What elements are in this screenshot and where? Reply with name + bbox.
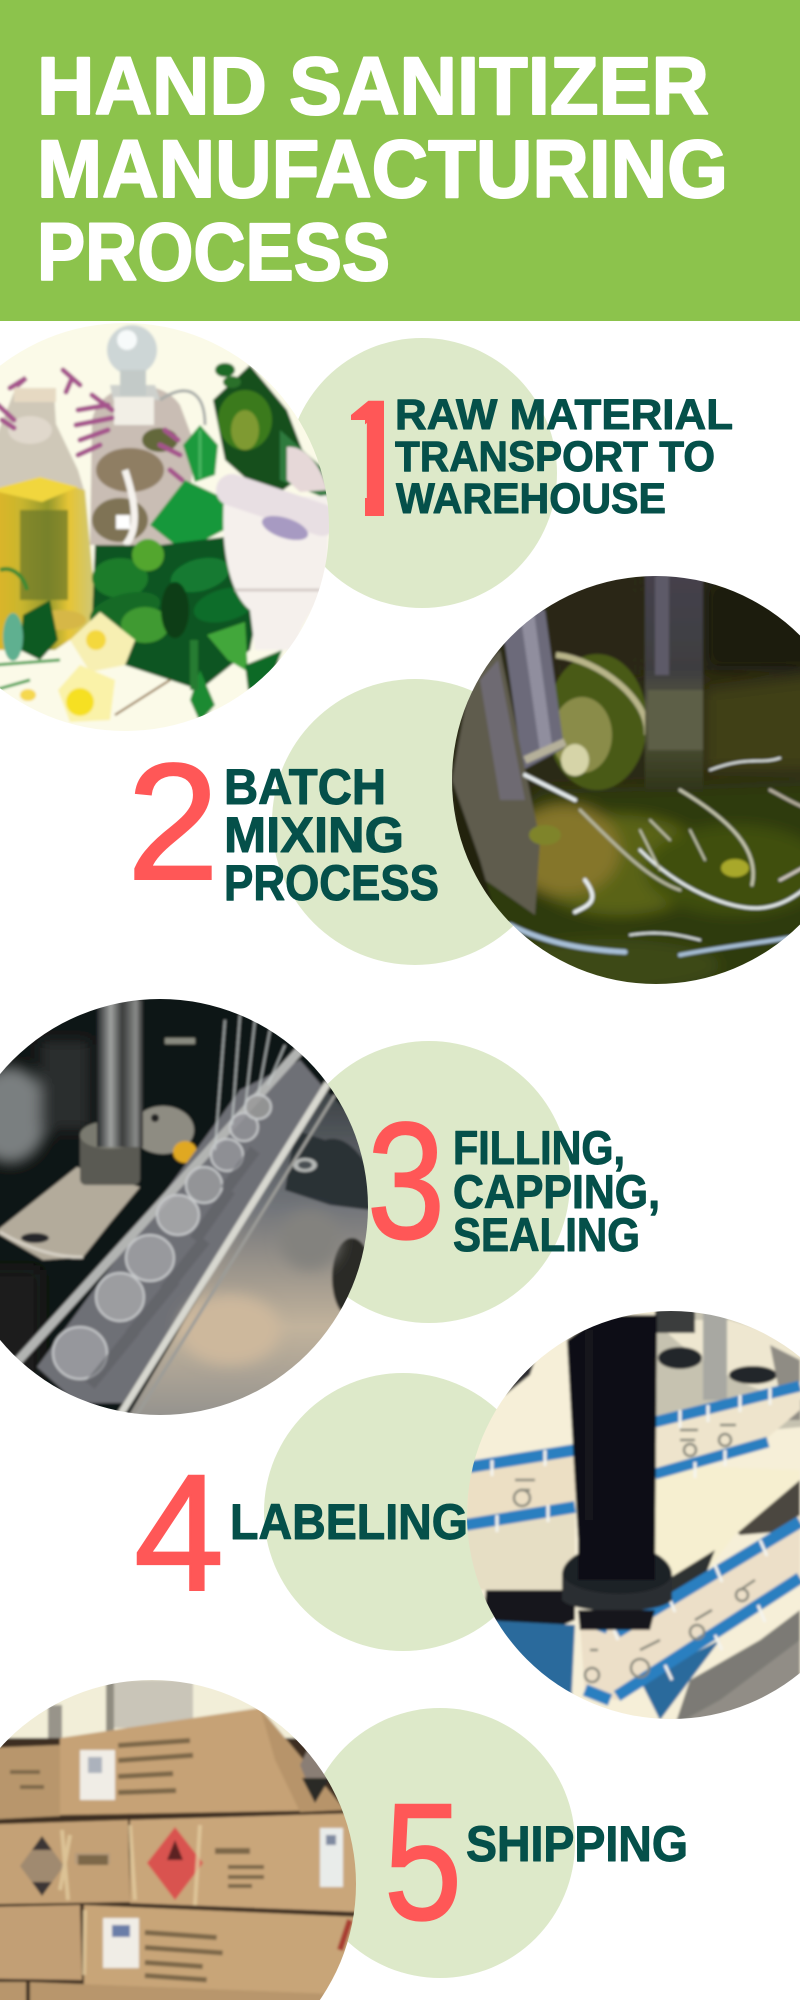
label: batch mixing process: PROCESS xyxy=(224,855,439,911)
label: filling capping sealing: CAPPING, xyxy=(453,1165,660,1218)
panel: step 5 shipping xyxy=(0,1675,688,2000)
photo: bottle filling line xyxy=(0,990,385,1430)
label: shipping: SHIPPING xyxy=(466,1816,688,1872)
green backing circle 1 xyxy=(287,338,557,608)
title: HAND SANITIZER xyxy=(37,41,709,132)
label: raw material transport to warehouse: RAW MATERIAL xyxy=(395,391,733,439)
photo: herbs, oil bottles and mortar xyxy=(0,320,340,740)
photo: labeling machine xyxy=(460,1305,800,1735)
panel: step 1 raw material xyxy=(0,320,733,740)
number 3: 3 xyxy=(367,1089,445,1274)
photo: green mixture being stirred xyxy=(440,570,800,1000)
label: batch mixing process: MIXING xyxy=(224,807,404,863)
label: raw material transport to warehouse: WAREHOUSE xyxy=(396,475,666,523)
label: raw material transport to warehouse: TRANSPORT TO xyxy=(395,433,715,481)
title: PROCESS xyxy=(37,207,390,298)
label: filling capping sealing: SEALING xyxy=(453,1208,640,1261)
label: batch mixing process xyxy=(224,759,439,911)
header band xyxy=(0,0,800,321)
label: batch mixing process: BATCH xyxy=(224,759,386,815)
title xyxy=(37,41,728,298)
number 4: 4 xyxy=(134,1441,224,1626)
label: labeling: LABELING xyxy=(230,1494,468,1550)
panel: step 2 batch mixing xyxy=(127,570,800,1000)
title: MANUFACTURING xyxy=(37,124,728,215)
label: filling capping sealing xyxy=(453,1121,660,1261)
photo: stacked cardboard boxes xyxy=(0,1675,370,2000)
number 2: 2 xyxy=(127,730,219,915)
panel: step 3 filling capping sealing xyxy=(0,990,660,1430)
green backing circle 4 xyxy=(264,1373,542,1651)
label: raw material transport to warehouse xyxy=(395,391,733,523)
label: filling capping sealing: FILLING, xyxy=(453,1121,625,1174)
panel: step 4 labeling xyxy=(134,1305,800,1735)
number 5: 5 xyxy=(384,1770,462,1955)
number 1: 1 xyxy=(337,367,410,552)
green backing circle 2 xyxy=(272,679,558,965)
green backing circle 5 xyxy=(305,1708,575,1978)
green backing circle 3 xyxy=(288,1041,570,1323)
